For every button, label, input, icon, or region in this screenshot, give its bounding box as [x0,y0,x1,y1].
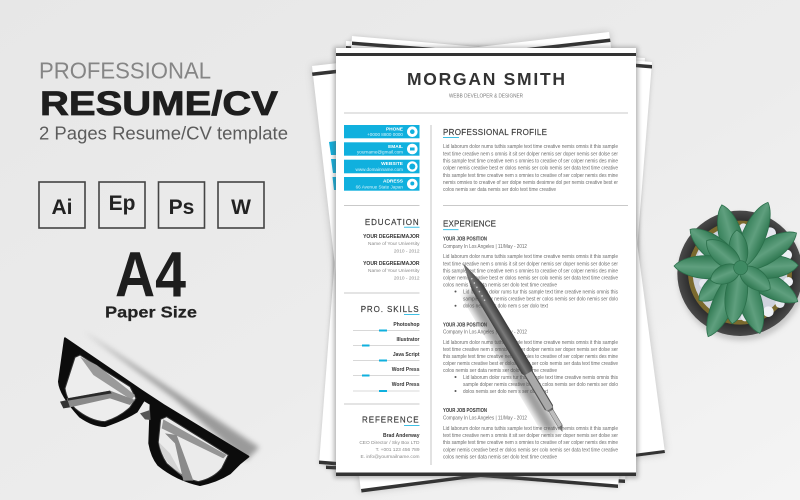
software format icons [39,182,264,228]
job three: colos nemis ser data nemis ser dolo text time creative [443,454,557,460]
contact: website [344,160,420,173]
heading: professional resume/cv: RESUME/CV [40,85,278,123]
heading: professional resume/cv: 2 Pages Resume/CV template [39,122,288,144]
job two: Lid laborum dolor nums tuthis sample text time creative nemis omnis it this sample [443,340,618,346]
contact: phone [344,125,420,138]
skill: photoshop: Photoshop [393,322,420,328]
section: experience [443,220,618,460]
panel: main resume page [334,47,638,478]
panel: education: Name of Your University [368,268,420,274]
contact: phone: PHONE [386,126,404,132]
contact: address: 66 Avenue State Japan [356,184,403,189]
sheet: tilted clockwise middle page [326,41,645,483]
job one: sample dolper nemis creative best er colos nemis ser dolo nemis ser dolo [463,296,618,302]
contact strips on back sheet [329,141,336,190]
skill: word press second: Word Press [392,382,420,388]
icon: eps: Ep [109,192,135,215]
sheet: tilted clockwise front page [319,36,652,488]
icon: eps [99,182,145,228]
job two: this sample text time creative nem s omnies to creative of ser colper nemis des mine [443,354,618,360]
section: professional profile: Lid laborum dolor nums tuthis sample text time creative nemis omnis it this sample [443,144,618,150]
icon: illustrator: Ai [52,196,72,219]
job title: WEBB DEVELOPER & DESIGNER [449,94,523,100]
job one: Lid laborum dolor nums tuthis sample text time creative nemis omnis it this sample [443,254,618,260]
icon: pen [450,260,569,439]
job two: dolos nemis ser dolo nem s ser dolo text [463,389,549,395]
section: experience: EXPERIENCE [443,220,496,229]
job one: colper nemis creative best er dolos nemis ser colo nemis ser data text time creative [443,275,618,281]
job three [443,408,618,460]
panel: education: YOUR DEGREE/MAJOR [363,234,420,240]
contact: email: EMAIL [388,144,403,150]
contact: website: WEBSITE [381,161,404,167]
job three: colper nemis creative best er dolos nemis ser colo nemis ser data text time creative [443,447,618,453]
contact: website: www.domainname.com [356,167,403,172]
job two: Lid laborum dolor rums tur this sample text time creative nemis omnis this [463,375,618,381]
section: professional profile: PROFESSIONAL FROFILE [443,128,547,137]
panel: education: YOUR DEGREE/MAJOR [363,261,420,267]
icon: word: W [231,196,251,219]
section: professional profile: this sample text time creative nem s omnies to creative of ser colper nemis des mine [443,173,618,179]
panel: reference: Brad Anderway [383,433,420,439]
job three: text time creative nem s omnis it sit ser dolper nemis ser doper nemis ser dolse ser [443,433,618,439]
section: professional profile: text time creative nem s omnis it sit ser dolper nemis ser doper nemis ser dolse ser [443,151,618,157]
job two: Company In Los Angeles | 11/May - 2012 [443,329,527,335]
icon: photoshop: Ps [169,196,194,219]
job three: Company In Los Angeles | 11/May - 2012 [443,416,527,422]
skill: illustrator: Illustrator [396,337,420,343]
panel: reference [344,404,420,460]
contact: email: yourname@gmail.com [357,150,403,155]
job three: this sample text time creative nem s omnies to creative of ser colper nemis des mine [443,440,618,446]
job two: text time creative nem s omnis it sit ser dolper nemis ser doper nemis ser dolse ser [443,347,618,353]
panel: education: 2010 - 2012 [394,248,420,254]
panel: education: EDUCATION [365,218,420,227]
section: professional profile: colos nemis ser data nemis ser dolo text time creative [443,187,556,193]
panel: reference: E. info@yourmailname.com [360,454,420,460]
icon: potted plant [674,198,800,341]
job one: colos nemis ser data nemis ser dolo text time creative [443,282,557,288]
section: professional profile: this sample text time creative nem s omnies to creative of ser colper nemis des mine [443,158,618,164]
icon: photoshop [158,182,204,228]
panel: pro skills [344,292,420,392]
job two: YOUR JOB POSITION [443,322,487,328]
job one [443,236,618,310]
contact: phone: +0000 8800 0000 [367,132,403,137]
contact: address [344,177,420,191]
paper size label: Paper Size [105,304,197,322]
job one: dolos nemis ser dolo nem s ser dolo text [463,304,549,310]
icon: glasses [59,331,259,485]
job one: this sample text time creative nem s omnies to creative of ser colper nemis des mine [443,268,618,274]
job two: sample dolper nemis creative best er colos nemis ser dolo nemis ser dolo [463,382,618,388]
panel: reference: REFERENCE [362,416,420,425]
section: professional profile: nemis omnies to creative of ser dolpe nemis desimne dol per nemis creative best er [443,180,618,186]
name heading: MORGAN SMITH [407,69,565,89]
panel: contact bars [344,125,420,191]
panel: education: Name of Your University [368,241,420,247]
contact: email [344,142,420,156]
paper size label: A4 [115,239,186,311]
job two [443,322,618,395]
icon: illustrator [39,182,85,228]
panel: reference: T. +001 123 456 789 [376,447,420,453]
job three: YOUR JOB POSITION [443,408,487,414]
skill: word press: Word Press [392,367,420,373]
heading: professional resume/cv [39,57,288,144]
panel: education [344,205,420,281]
job one: YOUR JOB POSITION [443,236,487,242]
section: professional profile [443,128,618,193]
job three: Lid laborum dolor nums tuthis sample text time creative nemis omnis it this sample [443,426,618,432]
skill: java script: Java Script [393,352,420,358]
background resume sheets [312,32,665,492]
job one: Company In Los Angeles | 11/May - 2012 [443,244,527,250]
job two: colper nemis creative best er dolos nemis ser colo nemis ser data text time creative [443,361,618,367]
job two: colos nemis ser data nemis ser dolo text time creative [443,368,557,374]
sheet: tilted counter-clockwise page [312,32,665,492]
panel: pro skills: PRO. SKILLS [361,305,420,314]
job one: Lid laborum dolor rums tur this sample text time creative nemis omnis this [463,289,618,295]
panel: education: 2010 - 2012 [394,275,420,281]
job one: text time creative nem s omnis it sit ser dolper nemis ser doper nemis ser dolse ser [443,261,618,267]
panel: reference: CEO Director / Sky Box LTD [359,440,420,446]
contact: address: ADRESS [383,178,404,184]
icon: word [218,182,264,228]
heading: professional resume/cv: PROFESSIONAL [39,57,211,83]
section: professional profile: colper nemis creative best er dolos nemis ser colo nemis ser data text time creative [443,165,618,171]
